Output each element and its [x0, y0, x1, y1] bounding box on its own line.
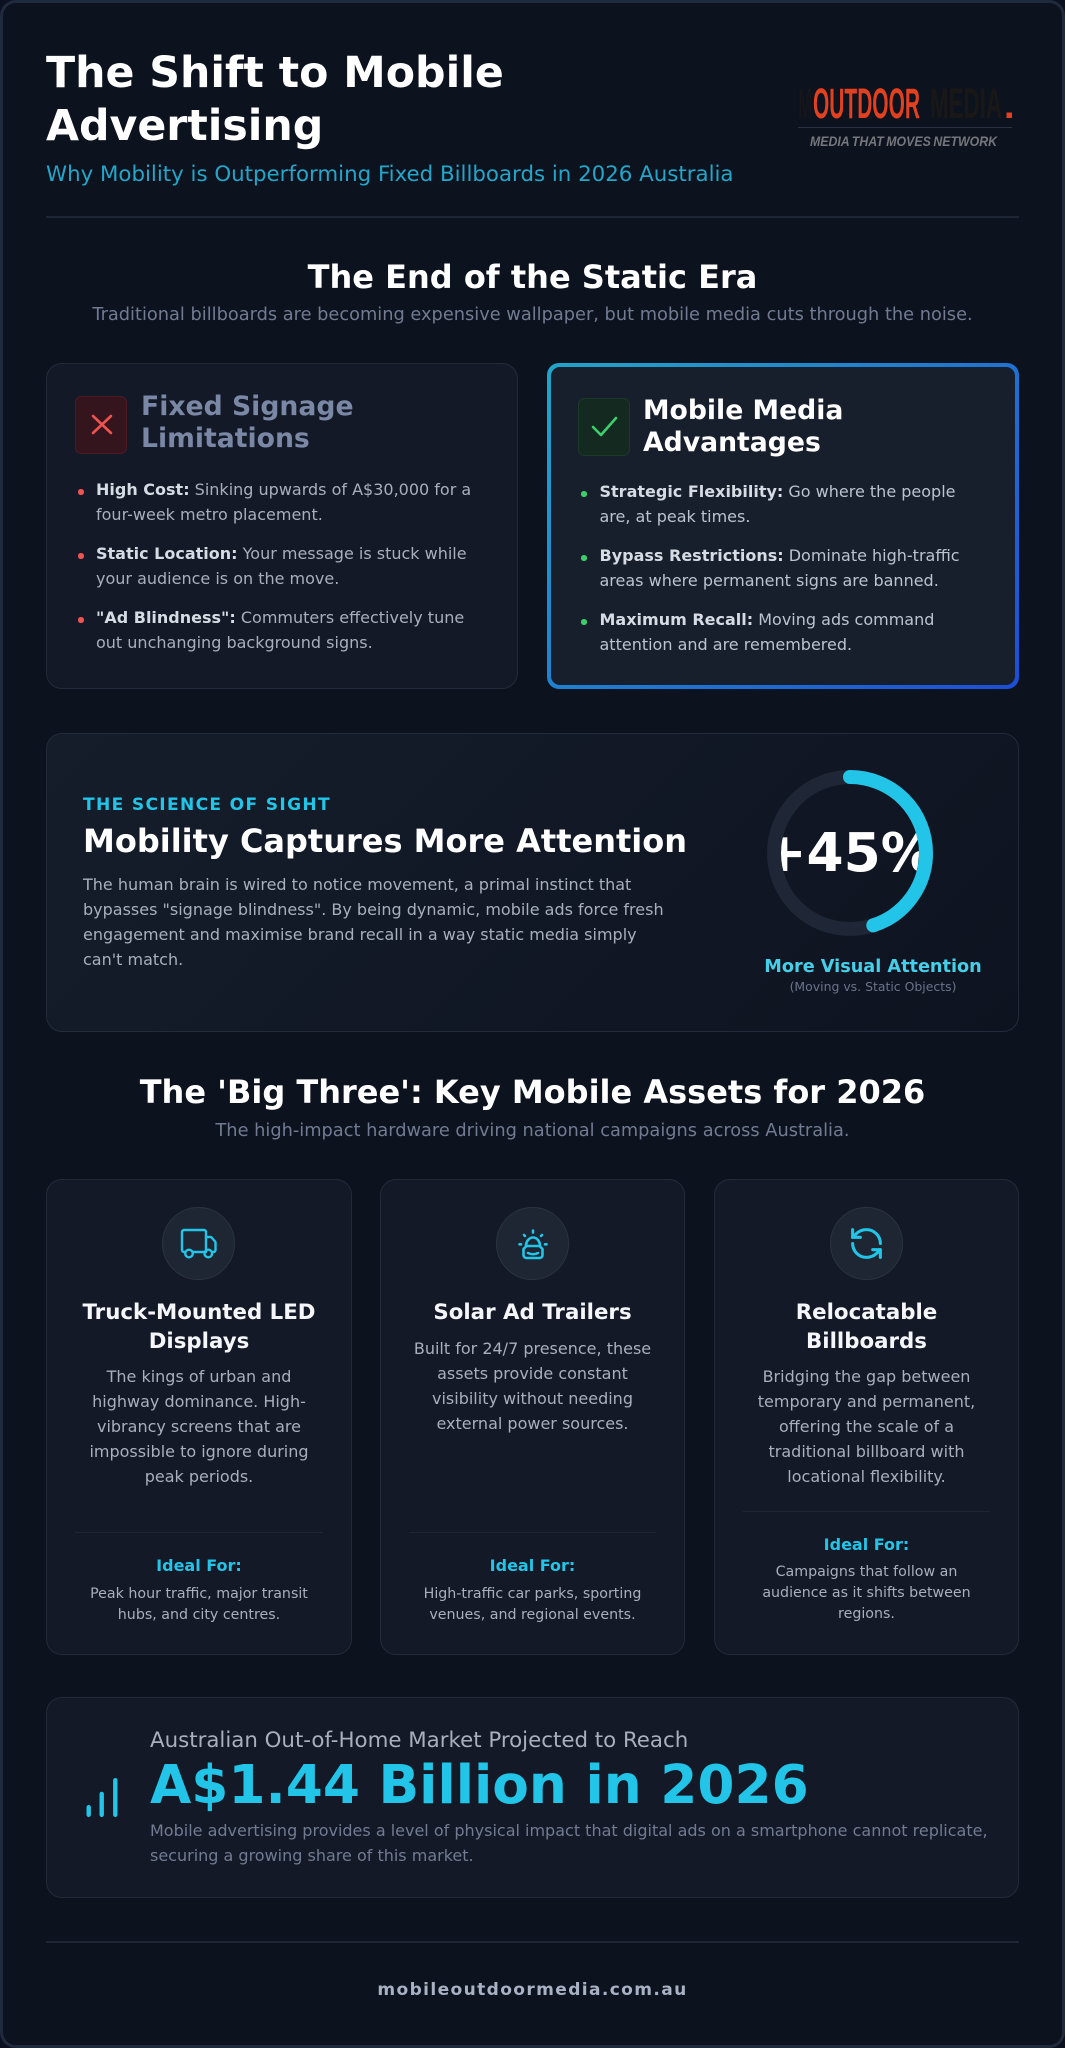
truck description — [89, 1367, 309, 1486]
mobile media heading: Mobile Media — [643, 395, 843, 426]
bullet: static location: your audience is on the move. — [96, 569, 339, 588]
solar description: Built for 24/7 presence, these — [414, 1339, 651, 1358]
big three intro: The high-impact hardware driving national campaigns across Australia. — [215, 1121, 850, 1141]
fixed signage heading: Fixed Signage — [141, 391, 354, 422]
relocatable description: Bridging the gap between — [763, 1367, 970, 1386]
panel: market projection — [46, 1697, 1019, 1898]
relocatable description — [758, 1367, 975, 1486]
relocatable description: temporary and permanent, — [758, 1392, 975, 1411]
relocatable description: locational flexibility. — [787, 1467, 946, 1486]
panel: relocatable billboards — [714, 1179, 1019, 1655]
attention body: can't match. — [83, 950, 183, 969]
stat: +45 percent: +45% — [762, 821, 934, 884]
market body: securing a growing share of this market. — [150, 1846, 474, 1865]
stat caption: (Moving vs. Static Objects) — [790, 979, 956, 994]
truck description: The kings of urban and — [107, 1367, 291, 1386]
solar description: external power sources. — [436, 1414, 628, 1433]
attention body: bypasses "signage blindness". By being dynamic, mobile ads force fresh — [83, 900, 664, 919]
bullet: static location: Static Location: Your message is stuck while — [96, 544, 467, 563]
solar ideal for: Ideal For: — [490, 1556, 575, 1575]
panel: mobile media — [547, 363, 1019, 689]
truck ideal text — [90, 1586, 308, 1623]
mobile media heading — [643, 395, 843, 458]
market body — [150, 1821, 988, 1865]
bullet: maximum recall: Maximum Recall: Moving ads command — [600, 610, 934, 629]
solar ideal text: High-traffic car parks, sporting — [424, 1586, 641, 1602]
title: Advertising — [46, 101, 323, 151]
truck description: peak periods. — [145, 1467, 253, 1486]
footer url: mobileoutdoormedia.com.au — [377, 1980, 688, 2000]
relocatable title — [796, 1300, 937, 1354]
attention body: engagement and maximise brand recall in a way static media simply — [83, 925, 637, 944]
truck ideal text: Peak hour traffic, major transit — [90, 1586, 308, 1602]
logo — [798, 80, 1012, 149]
truck description: impossible to ignore during — [89, 1442, 309, 1461]
solar ideal text — [424, 1586, 641, 1623]
heading: end of static era: The End of the Static Era — [308, 258, 757, 296]
bullet: maximum recall — [581, 610, 934, 654]
fixed signage heading: Limitations — [141, 423, 310, 454]
fixed signage heading — [141, 391, 354, 454]
icon: relocate arrows — [830, 1207, 903, 1280]
relocatable description: offering the scale of a — [779, 1417, 954, 1436]
panel: truck-mounted LED — [46, 1179, 352, 1655]
market figure: A$1.44 Billion in 2026 — [150, 1753, 809, 1816]
panel: science of sight — [46, 733, 1019, 1032]
truck title: Truck-Mounted LED — [82, 1300, 316, 1325]
panel: fixed signage — [46, 363, 518, 689]
mobile media heading: Advantages — [643, 427, 821, 458]
truck ideal text: hubs, and city centres. — [118, 1607, 280, 1623]
relocatable description: traditional billboard with — [769, 1442, 964, 1461]
bullet: bypass restrictions: areas where permanent signs are banned. — [600, 571, 939, 590]
subtitle: Why Mobility is Outperforming Fixed Billboards in 2026 Australia — [46, 162, 734, 187]
attention heading: Mobility Captures More Attention — [83, 822, 687, 860]
relocatable ideal text: regions. — [838, 1606, 895, 1622]
bullet: strategic flexibility — [581, 482, 955, 526]
panel: solar ad trailers — [380, 1179, 685, 1655]
bullet: ad blindness: out unchanging background signs. — [96, 633, 373, 652]
icon: check — [578, 398, 630, 456]
icon: truck — [162, 1207, 235, 1280]
relocatable title: Relocatable — [796, 1300, 937, 1325]
solar ideal text: venues, and regional events. — [429, 1607, 636, 1623]
bullet: ad blindness: "Ad Blindness": Commuters effectively tune — [96, 608, 464, 627]
attention body — [82, 875, 664, 969]
solar description: assets provide constant — [437, 1364, 628, 1383]
section intro: Traditional billboards are becoming expensive wallpaper, but mobile media cuts through the noise. — [92, 305, 973, 325]
heading: big three: The 'Big Three': Key Mobile Assets for 2026 — [140, 1073, 925, 1111]
solar description: visibility without needing — [432, 1389, 633, 1408]
solar title: Solar Ad Trailers — [433, 1300, 632, 1325]
bullet: strategic flexibility: Strategic Flexibility: Go where the people — [600, 482, 955, 501]
bullet: high cost: four-week metro placement. — [96, 505, 323, 524]
stat label: More Visual Attention — [764, 957, 982, 977]
truck title — [82, 1300, 316, 1354]
truck ideal for: Ideal For: — [156, 1556, 242, 1575]
relocatable ideal for: Ideal For: — [824, 1535, 909, 1554]
icon: solar — [496, 1207, 569, 1280]
market body: Mobile advertising provides a level of physical impact that digital ads on a smartphone cannot replicate, — [150, 1821, 988, 1840]
ring gauge — [767, 770, 933, 936]
bullet: ad blindness — [78, 608, 464, 652]
logo: M — [798, 80, 812, 128]
bullet: strategic flexibility: are, at peak times. — [600, 507, 750, 526]
relocatable ideal text: audience as it shifts between — [762, 1585, 971, 1601]
truck description: vibrancy screens that are — [97, 1417, 301, 1436]
solar description — [414, 1339, 651, 1433]
eyebrow label: THE SCIENCE OF SIGHT — [83, 795, 331, 815]
icon: signal bars — [86, 1778, 118, 1817]
relocatable title: Billboards — [806, 1329, 927, 1354]
attention body: The human brain is wired to notice movement, a primal instinct that — [83, 875, 631, 894]
bullet: static location — [78, 544, 467, 588]
truck description: highway dominance. High- — [92, 1392, 306, 1411]
icon: cross — [75, 396, 127, 454]
market intro: Australian Out-of-Home Market Projected to Reach — [150, 1728, 688, 1753]
relocatable ideal text: Campaigns that follow an — [776, 1564, 957, 1580]
bullet: maximum recall: attention and are remembered. — [600, 635, 852, 654]
relocatable ideal text — [762, 1564, 971, 1622]
bullet: bypass restrictions: Bypass Restrictions: Dominate high-traffic — [600, 546, 960, 565]
title: The Shift to Mobile — [46, 48, 504, 98]
title — [46, 48, 504, 151]
bullet: bypass restrictions — [581, 546, 960, 590]
bullet: high cost — [78, 480, 471, 524]
truck title: Displays — [149, 1329, 249, 1354]
bullet: high cost: High Cost: Sinking upwards of A$30,000 for a — [96, 480, 471, 499]
logo: MEDIA THAT MOVES NETWORK — [810, 133, 998, 149]
